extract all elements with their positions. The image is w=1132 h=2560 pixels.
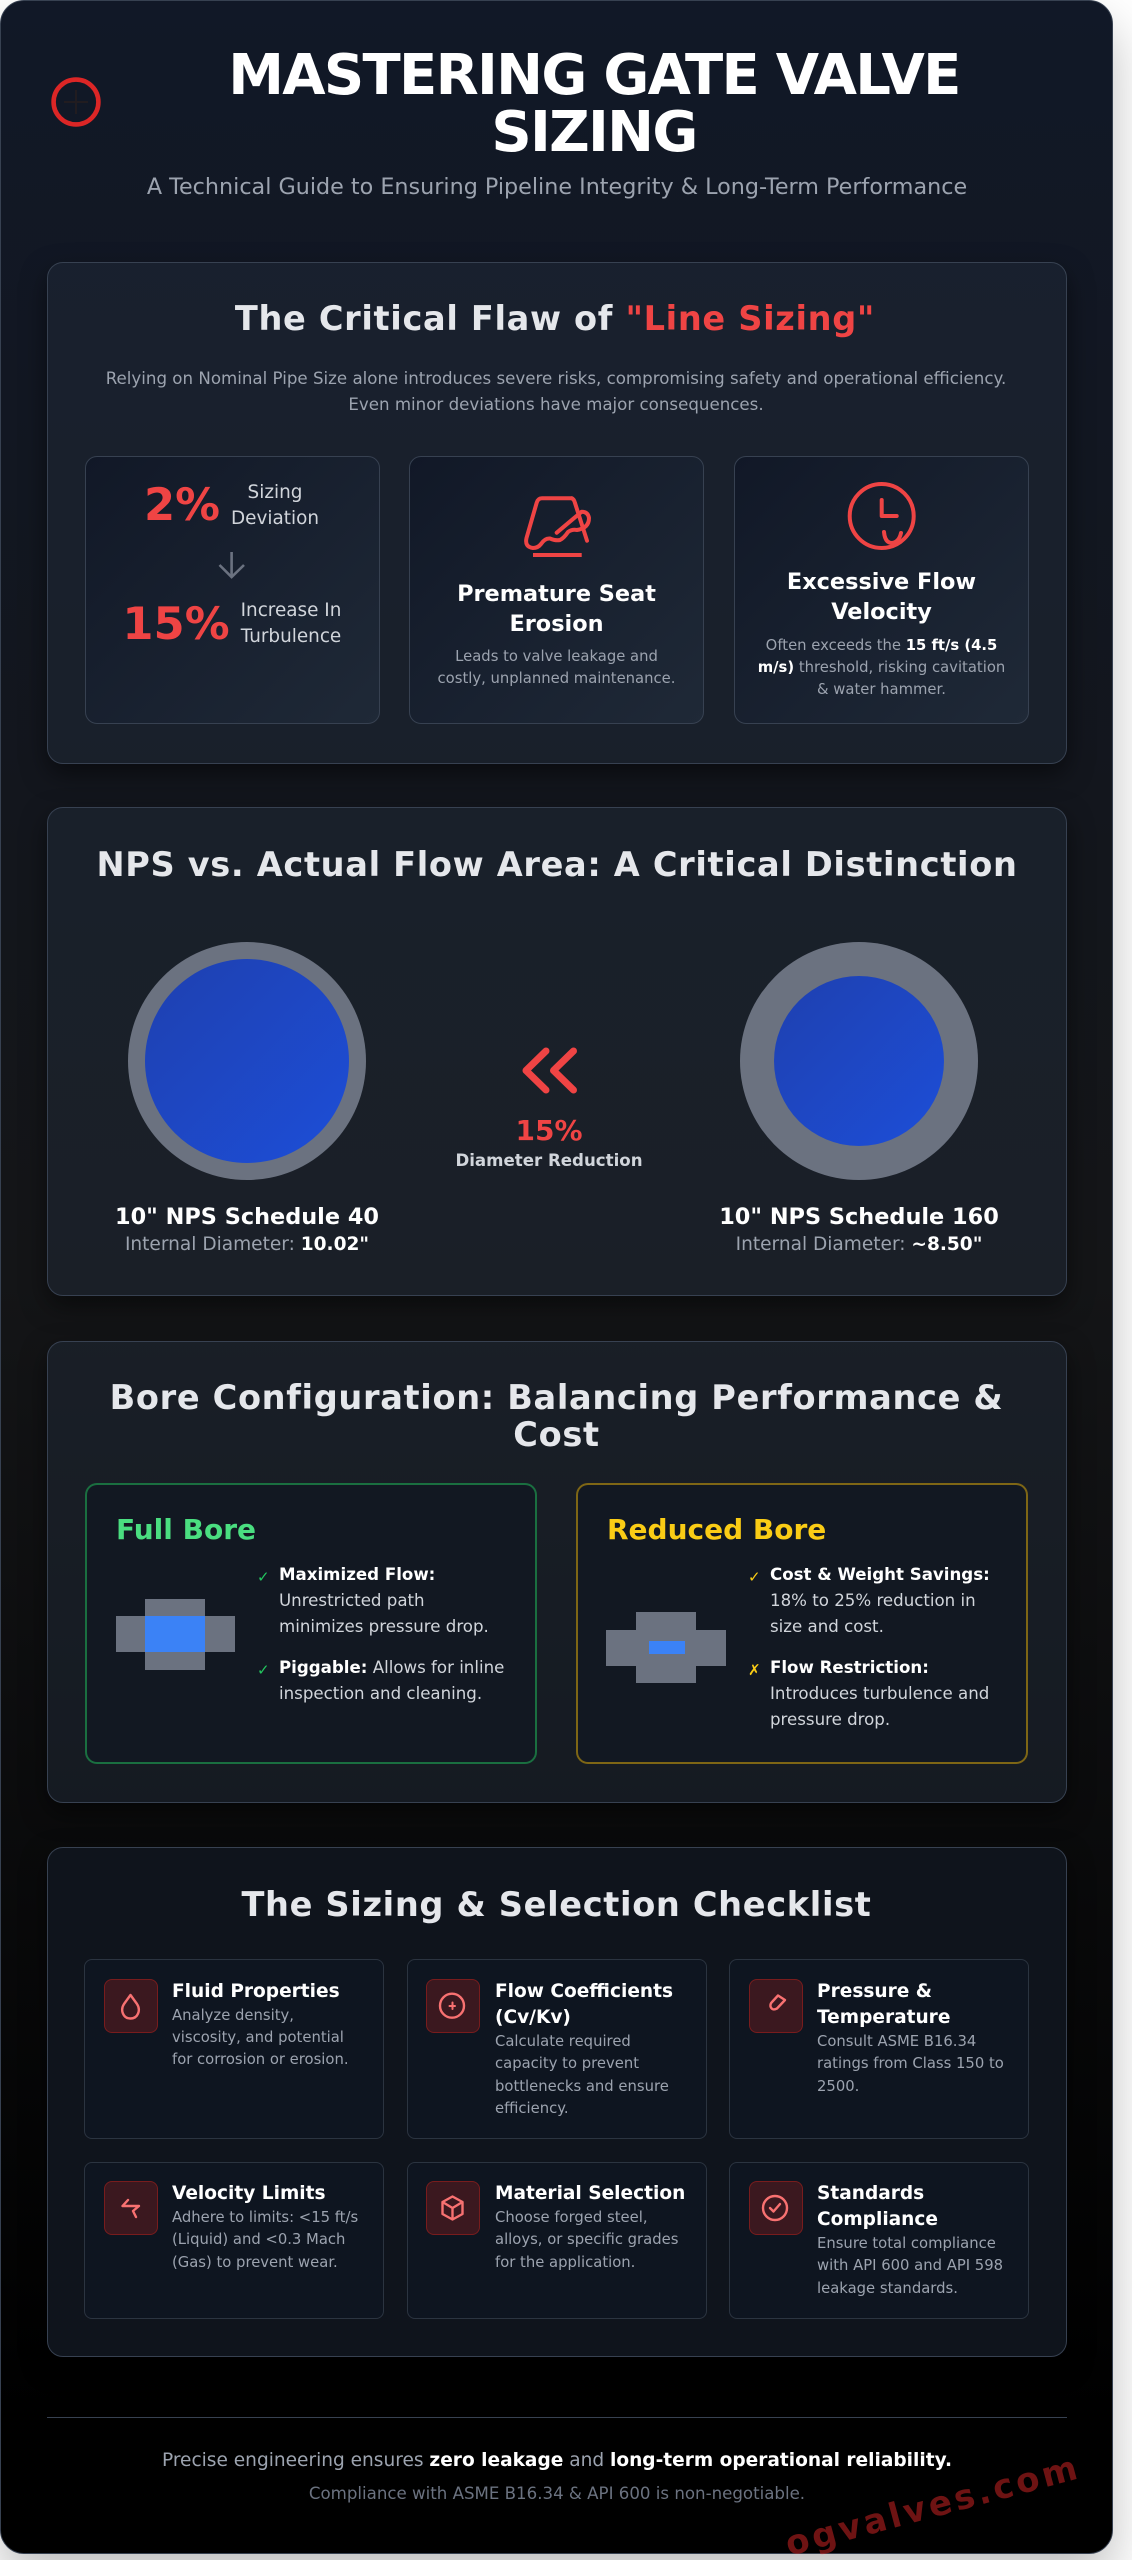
panel: bore configuration [47,1341,1067,1803]
bullet: flow restriction: ✗ [748,1661,761,1679]
footer statement: Precise engineering ensures zero leakage and long-term operational reliability. [162,2450,952,2471]
icon: eroded seat [524,496,591,557]
item: material selection [407,2162,707,2319]
item text: bottlenecks and ensure [495,2078,669,2095]
bullet: flow restriction: pressure drop. [770,1710,890,1729]
item title [817,1981,950,2028]
label: sizing deviation: Deviation [231,508,319,529]
item text [495,2033,669,2117]
label: diameter reduction: Diameter Reduction [455,1151,643,1170]
item title: Temperature [817,2007,950,2028]
diagram: full bore valve [116,1599,235,1670]
item title: Standards [817,2183,924,2204]
item: standards compliance [729,2162,1029,2319]
list: full bore points [257,1565,504,1703]
item text: (Gas) to prevent wear. [172,2254,338,2271]
footer note: Compliance with ASME B16.34 & API 600 is non-negotiable. [309,2484,805,2503]
card title: full bore: Full Bore [116,1513,256,1546]
icon: pressure pill [749,1979,803,2033]
card: full bore [85,1483,537,1764]
label: schedule 160: 10" NPS Schedule 160 [719,1204,999,1230]
bullet: flow restriction: Introduces turbulence and [770,1684,989,1703]
stat: 15 percent: 15% [122,597,230,650]
item title: Flow Coefficients [495,1981,673,2002]
item title: Velocity Limits [172,2183,326,2204]
card text: Often exceeds the 15 ft/s (4.5 [766,636,997,654]
item text: Consult ASME B16.34 [817,2033,976,2050]
item: velocity limits [84,2162,384,2319]
bullet: cost and weight savings: size and cost. [770,1617,884,1636]
stat: 15 percent reduction: 15% [515,1114,583,1147]
label: increase in turbulence: Turbulence [241,626,341,647]
item title: Material Selection [495,2183,685,2204]
bullet: cost and weight savings [748,1565,990,1636]
card: reduced bore [576,1483,1028,1764]
card text: & water hammer. [817,681,946,698]
card: excessive flow velocity [734,456,1029,724]
item text: for corrosion or erosion. [172,2051,349,2068]
text: schedule 160 diameter: Internal Diameter: ~8.50" [736,1234,982,1255]
bullet: piggable: Piggable: Allows for inline [279,1658,504,1677]
diagram: schedule 160 pipe [740,942,978,1180]
icon: velocity arrows [104,2181,158,2235]
item title: (Cv/Kv) [495,2007,571,2028]
card title: Velocity [831,599,932,625]
heading: checklist: The Sizing & Selection Checklist [241,1884,872,1924]
text: schedule 40 diameter: Internal Diameter: 10.02" [125,1234,369,1255]
item text: with API 600 and API 598 [817,2257,1003,2274]
bullet: cost and weight savings: 18% to 25% reduction in [770,1591,976,1610]
card text [758,636,1005,698]
subtitle: A Technical Guide to Ensuring Pipeline Integrity & Long-Term Performance [147,174,967,200]
flow area: schedule 40 [145,959,349,1163]
item text: Adhere to limits: <15 ft/s [172,2209,358,2226]
icon: double chevron [522,1048,577,1094]
icon: check circle [749,2181,803,2235]
bullet: cost and weight savings: ✓ [748,1568,761,1586]
item: flow coefficients [407,1959,707,2139]
card: premature seat erosion [409,456,704,724]
label: sizing deviation: Sizing [248,482,302,503]
intro text: Relying on Nominal Pipe Size alone introduces severe risks, compromising safety and operational efficiency. [106,369,1006,388]
item text: efficiency. [495,2100,569,2117]
item text: 2500. [817,2078,859,2095]
label: sizing deviation [231,482,319,529]
item text: alloys, or specific grades [495,2231,678,2248]
bullet: piggable: inspection and cleaning. [279,1684,482,1703]
diagram: schedule 40 pipe [128,942,366,1180]
card text: costly, unplanned maintenance. [438,670,675,687]
bullet: maximized flow: ✓ [257,1568,270,1586]
item text [817,2235,1003,2297]
label: increase in turbulence [240,600,341,647]
bullet: piggable: ✓ [257,1661,270,1679]
intro text [106,369,1006,414]
card: deviation stats [85,456,380,724]
heading: NPS vs actual: NPS vs. Actual Flow Area: A Critical Distinction [96,845,1018,884]
item text: ratings from Class 150 to [817,2055,1004,2072]
card title [787,569,976,625]
item title [495,1981,673,2028]
bullet: maximized flow: minimizes pressure drop. [279,1617,489,1636]
icon: drop [104,1979,158,2033]
item: fluid properties [84,1959,384,2139]
item text [172,2209,358,2271]
bullet: maximized flow: Unrestricted path [279,1591,425,1610]
intro text: Even minor deviations have major consequences. [348,395,764,414]
item text: capacity to prevent [495,2055,639,2072]
item title [817,2183,938,2230]
bullet: flow restriction [748,1658,989,1729]
item title: Pressure & [817,1981,932,2002]
item text: Calculate required [495,2033,631,2050]
item title: Fluid Properties [172,1981,340,2002]
item text: for the application. [495,2254,635,2271]
card title: reduced bore: Reduced Bore [607,1513,826,1546]
item text: Analyze density, [172,2006,294,2024]
flow area: schedule 160 [774,976,944,1146]
title [228,43,960,164]
item text [817,2033,1004,2095]
item text: (Liquid) and <0.3 Mach [172,2231,345,2248]
item text: Ensure total compliance [817,2235,996,2252]
item title: Compliance [817,2209,938,2230]
heading: critical flaw: The Critical Flaw of "Line Sizing" [235,299,875,338]
label: increase in turbulence: Increase In [241,600,341,621]
bullet: maximized flow [257,1565,489,1636]
bullet: cost and weight savings: Cost & Weight Savings: [770,1565,990,1584]
icon: down arrow [218,552,245,579]
panel: sizing checklist [47,1847,1067,2357]
card text: Leads to valve leakage and [455,648,658,665]
card title [457,581,656,637]
diagram: reduced bore valve [606,1612,726,1683]
panel: NPS vs actual flow area [47,807,1067,1296]
card title: Excessive Flow [787,569,976,595]
stat: 2 percent: 2% [144,478,220,531]
item: pressure and temperature [729,1959,1029,2139]
item text: viscosity, and potential [172,2029,344,2046]
icon: cube [426,2181,480,2235]
item text: leakage standards. [817,2280,958,2297]
item text: Choose forged steel, [495,2209,648,2226]
title: MASTERING GATE VALVE [228,43,960,108]
card text [438,648,675,687]
card text: m/s) threshold, risking cavitation [758,659,1005,676]
card title: Erosion [509,611,604,637]
item text [495,2209,678,2271]
item text [172,2006,349,2068]
list: reduced bore points [748,1565,990,1729]
heading: bore configuration: Cost [513,1414,600,1454]
bullet: maximized flow: Maximized Flow: [279,1565,435,1584]
panel: critical flaw [47,262,1067,764]
bullet: piggable [257,1658,504,1703]
title: SIZING [491,100,697,164]
icon: clock [848,482,916,550]
heading: bore configuration: Bore Configuration: Balancing Performance & [110,1378,1003,1416]
card title: Premature Seat [457,581,656,607]
icon: flow gauge [426,1979,480,2033]
icon: logo ring [51,77,101,127]
bullet: flow restriction: Flow Restriction: [770,1658,929,1677]
label: schedule 40: 10" NPS Schedule 40 [115,1204,379,1230]
heading: bore configuration [110,1378,1003,1454]
